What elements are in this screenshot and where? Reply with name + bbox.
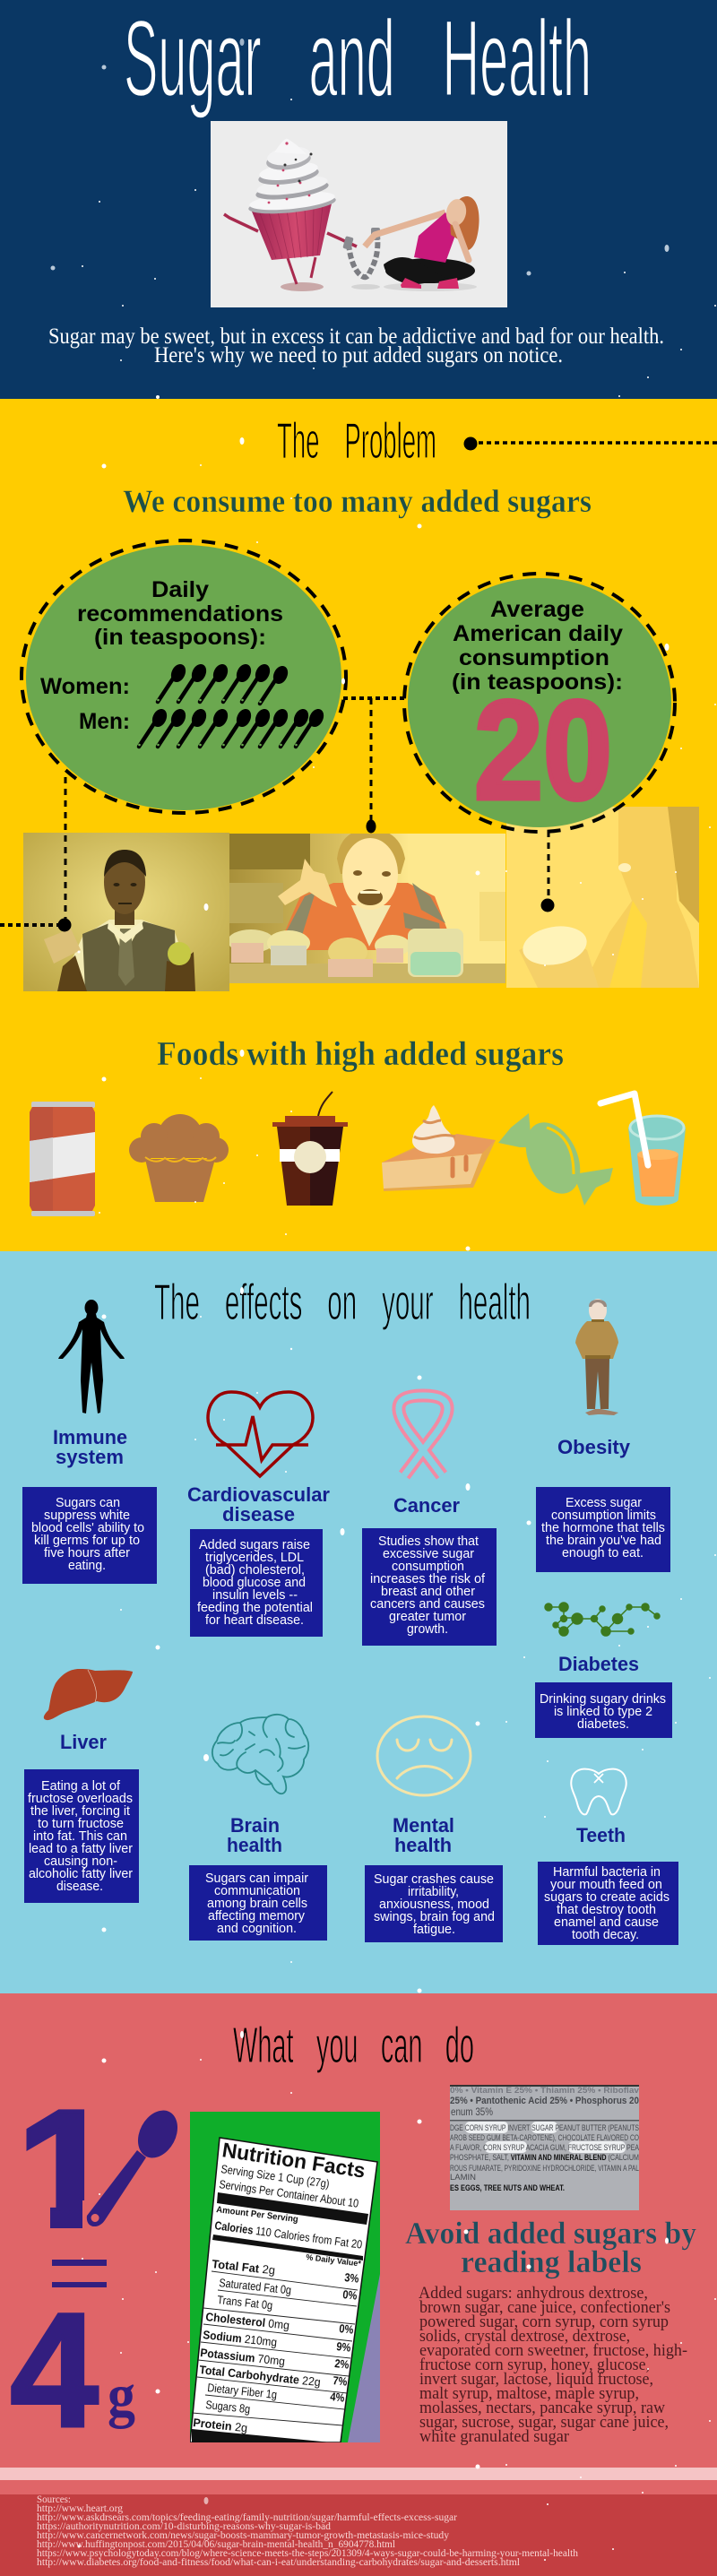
text box: mental health: Sugar crashes cause <box>374 1871 494 1887</box>
text box: brain health: and cognition. <box>217 1921 297 1936</box>
text block: list of added sugars: fructose corn syrup, honey, glucose, <box>419 2356 650 2374</box>
text box: immune system: eating. <box>68 1558 106 1573</box>
number: 1: 1 <box>16 2075 116 2262</box>
text box: diabetes: Drinking sugary drinks <box>540 1691 666 1707</box>
photo: ingredient list: enum 35% <box>451 2105 493 2118</box>
text box: brain health <box>189 1865 327 1941</box>
heading: avoid added sugars by reading labels: reading labels <box>461 2244 642 2279</box>
label: cardiovascular disease <box>187 1483 330 1526</box>
panel: sources: Sources: <box>37 2494 71 2505</box>
label: immune system <box>53 1426 127 1468</box>
text box: mental health: swings, brain fog and <box>374 1909 495 1924</box>
text box: cancer: Studies show that <box>378 1534 479 1549</box>
footer band <box>0 2468 717 2480</box>
photo: nutrition facts label: Dietary Fiber 1g <box>207 2381 278 2401</box>
photo: ingredient list: ROUS FUMARATE, PYRIDOXINE HYDROCHLORIDE, VITAMIN A PAL <box>450 2164 639 2174</box>
photo: girl reaching for cupcakes <box>228 829 505 983</box>
graphic: 1 teaspoon equals 4 grams <box>11 2109 177 2429</box>
text box: cancer: excessive sugar <box>383 1546 474 1561</box>
photo: nutrition facts label: Saturated Fat 0g <box>219 2276 292 2296</box>
text box: diabetes <box>535 1682 672 1738</box>
photo: nutrition facts label: Serving Size 1 Cup (27g) <box>220 2162 330 2191</box>
label: brain health: health <box>227 1834 282 1856</box>
photo: nutrition facts label: 0% <box>339 2321 355 2337</box>
photo: ingredient list: LAMIN <box>450 2173 476 2183</box>
text box: liver: fructose overloads <box>28 1791 133 1806</box>
photo: nutrition facts label: 9% <box>336 2339 352 2355</box>
photo: nutrition facts label: 2% <box>334 2356 350 2372</box>
icon: teaspoon <box>87 2104 186 2226</box>
photo: nutrition facts label: 7% <box>333 2373 349 2389</box>
label: average american daily consumption: consumption <box>459 645 609 670</box>
label: average american daily consumption: Average <box>490 597 584 622</box>
text block: list of added sugars: molasses, nectars, pancake syrup, raw <box>419 2399 666 2417</box>
text box: liver: Eating a lot of <box>41 1778 121 1794</box>
photo: nutrition facts label: Nutrition Facts <box>220 2138 367 2183</box>
text: The Problem <box>277 412 436 470</box>
icon: glucose molecule <box>545 1603 660 1636</box>
text box: liver <box>24 1769 139 1903</box>
text box: immune system: kill germs for up to <box>34 1533 140 1548</box>
chart: daily recommendations circle <box>22 540 346 813</box>
label: cardiovascular disease: disease <box>222 1503 295 1526</box>
connectors: dotted lines to photos <box>0 698 554 932</box>
icon: muffin <box>129 1114 229 1202</box>
panel: sources <box>0 2494 717 2576</box>
text box: immune system: Sugars can <box>56 1495 120 1510</box>
text box: teeth: sugars to create acids <box>544 1889 669 1905</box>
icon: liver <box>44 1669 133 1720</box>
icon: heart with pulse <box>208 1392 313 1476</box>
label: diabetes: Diabetes <box>558 1653 639 1675</box>
text box: brain health: affecting memory <box>208 1908 305 1923</box>
text box: cancer: breast and other <box>381 1584 475 1599</box>
label: obesity: Obesity <box>557 1436 631 1458</box>
photo: ingredient list: A FLAVOR, CORN SYRUP ACACIA GUM, FRUCTOSE SYRUP PEA <box>450 2143 639 2153</box>
intro text: Here's why we need to put added sugars on notice. <box>154 343 563 367</box>
photo: nutrition facts label: Cholesterol 0mg <box>205 2310 290 2332</box>
photo: nutrition facts label: Calories 110 Calories from Fat 20 <box>214 2218 363 2252</box>
text box: cardiovascular disease: feeding the potential <box>197 1600 313 1615</box>
text box: obesity: Excess sugar <box>566 1495 642 1510</box>
icon: brain <box>212 1715 308 1794</box>
icon: awareness ribbon <box>399 1396 447 1475</box>
text box: mental health <box>365 1865 503 1942</box>
icon: sad face <box>377 1716 471 1795</box>
label: mental health: Mental <box>393 1814 454 1837</box>
text box: liver: alcoholic fatty liver <box>29 1866 133 1881</box>
intro text: Sugar may be sweet, but in excess it can be addictive and bad for our health. <box>48 324 664 349</box>
photo: ingredient list: ES EGGS, TREE NUTS AND WHEAT. <box>450 2183 565 2193</box>
text block: list of added sugars: white granulated sugar <box>419 2428 569 2446</box>
label: immune system: Immune <box>53 1426 127 1448</box>
text box: cardiovascular disease: triglycerides, LDL <box>205 1550 304 1565</box>
panel: sources: https://www.psychologytoday.com/blog/where-science-meets-the-steps/201309/4-ways-sugar-could-be-harming-your-mental-health <box>37 2548 578 2559</box>
text box: teeth: tooth decay. <box>572 1927 639 1942</box>
label: immune system: system <box>56 1446 124 1468</box>
text box: obesity: the hormone that tells <box>541 1520 665 1535</box>
text box: obesity: consumption limits <box>551 1508 656 1523</box>
text box: immune system: blood cells' ability to <box>31 1520 144 1535</box>
photo: nutrition facts label: Amount Per Serving <box>216 2205 298 2225</box>
photo: ingredient list: DGE CORN SYRUP INVERT SUGAR PEANUT BUTTER (PEANUTS <box>450 2123 639 2133</box>
text box: cardiovascular disease <box>190 1529 323 1637</box>
text box: mental health: anxiousness, mood <box>379 1897 489 1912</box>
text box: teeth: Harmful bacteria in <box>553 1864 661 1880</box>
label: teeth: Teeth <box>576 1824 626 1846</box>
text box: cancer: greater tumor <box>389 1609 466 1624</box>
label: women with six spoons: Women: <box>40 674 130 699</box>
text box: diabetes: diabetes. <box>577 1716 629 1732</box>
label: average american daily consumption <box>452 597 623 695</box>
icon: body silhouette <box>58 1300 125 1413</box>
text block: list of added sugars: invert sugar, lactose, liquid fructose, <box>419 2371 653 2389</box>
label: brain health: Brain <box>230 1814 280 1837</box>
photo: ingredient list: 25% • Pantothenic Acid 25% • Phosphorus 20 <box>450 2096 639 2106</box>
text box: brain health: Sugars can impair <box>205 1871 308 1886</box>
panel: sources: http://www.askdrsears.com/topics/feeding-eating/family-nutrition/sugar/harmful-effects-excess-sugar <box>37 2512 457 2523</box>
text box: teeth: your mouth feed on <box>550 1877 662 1892</box>
heading: foods with high added sugars: Foods with high added sugars <box>157 1035 564 1073</box>
text box: obesity: the brain you've had <box>546 1533 661 1548</box>
icon: soda can <box>30 1102 95 1216</box>
panel: header background <box>0 0 717 399</box>
photo: nutrition facts label: Servings Per Container About 10 <box>219 2177 359 2210</box>
label: cardiovascular disease: Cardiovascular <box>187 1483 330 1506</box>
text block: list of added sugars: malt syrup, maltose, maple syrup, <box>419 2385 639 2403</box>
label: men with nine spoons: Men: <box>79 709 130 734</box>
heading: what you can do: What you can do <box>233 2017 474 2074</box>
panel: sources: https://authoritynutrition.com/10-disturbing-reasons-why-sugar-is-bad <box>37 2521 331 2532</box>
label: cancer: Cancer <box>393 1494 460 1517</box>
icon: wrapped candy <box>498 1113 613 1206</box>
text block: list of added sugars: solids, crystal dextrose, dextrose, <box>419 2328 630 2346</box>
photo: ingredient list: AROB SEED GUM BETA-CAROTENE), CHOCOLATE FLAVORED CO <box>450 2133 639 2143</box>
number: 4: 4 <box>10 2278 99 2461</box>
chart: average american consumption circle <box>404 574 675 832</box>
text box: liver: the liver, forcing it <box>30 1803 131 1819</box>
text box: cancer <box>362 1528 497 1646</box>
text box: teeth <box>538 1862 678 1945</box>
text box: liver: into fat. This can <box>33 1828 127 1844</box>
text box: cardiovascular disease: insulin levels -- <box>212 1587 298 1603</box>
photo: nutrition facts label: 4% <box>330 2390 346 2405</box>
text box: liver: causing non- <box>44 1854 117 1869</box>
text box: cardiovascular disease: Added sugars raise <box>199 1537 310 1552</box>
text block: list of added sugars: sugar, sucrose, sugar, sugar cane juice, <box>419 2414 669 2432</box>
text box: cardiovascular disease: blood glucose and <box>203 1575 306 1590</box>
heading: we consume too many added sugars: We consume too many added sugars <box>123 483 592 519</box>
text block: list of added sugars: Added sugars: anhydrous dextrose, <box>419 2285 648 2303</box>
photo: man with pastry and apple <box>23 833 229 991</box>
text box: mental health: fatigue. <box>413 1922 455 1937</box>
panel: what you can do background <box>0 1993 717 2576</box>
photo: nutrition facts label: Sugars 8g <box>205 2398 251 2416</box>
text block: list of added sugars: powered sugar, corn syrup, corn syrup <box>419 2313 669 2331</box>
photo: nutrition facts label: Total Carbohydrate 22g <box>199 2363 322 2389</box>
text box: teeth: that destroy tooth <box>557 1902 656 1917</box>
text block: list of added sugars <box>419 2285 687 2446</box>
text box: obesity: enough to eat. <box>562 1545 644 1560</box>
text box: cancer: consumption <box>392 1559 464 1574</box>
connector: dotted line from heading <box>464 437 717 450</box>
text box: immune system <box>22 1487 157 1584</box>
heading: avoid added sugars by reading labels: Avoid added sugars by <box>405 2216 696 2251</box>
photo: woman eating cupcake <box>506 807 699 988</box>
photo: nutrition facts label: Sodium 210mg <box>203 2328 278 2349</box>
text block: list of added sugars: evaporated corn sweetner, fructose, high- <box>419 2342 687 2360</box>
text box: liver: to turn fructose <box>38 1816 124 1831</box>
text box: liver: lead to a fatty liver <box>29 1841 133 1856</box>
text block: list of added sugars: brown sugar, cane juice, confectioner's <box>419 2299 670 2317</box>
text box: cardiovascular disease: for heart disease. <box>205 1612 304 1628</box>
icon: coffee cup <box>272 1092 348 1206</box>
text box: cardiovascular disease: (bad) cholesterol, <box>205 1562 305 1578</box>
label: daily recommendations <box>77 577 283 650</box>
photo: nutrition facts label: Trans Fat 0g <box>217 2293 273 2312</box>
text box: obesity <box>536 1487 670 1572</box>
label: average american daily consumption: American daily <box>453 621 623 646</box>
text box: brain health: communication <box>214 1883 300 1898</box>
photo: ingredient list <box>450 2085 640 2210</box>
label: mental health <box>393 1814 454 1856</box>
photo: ingredient list: 0% • Vitamin E 25% • Thiamin 25% • Riboflav <box>450 2086 640 2096</box>
icon: older man <box>575 1299 618 1415</box>
panel: effects background <box>0 1251 717 1993</box>
text box: immune system: suppress white <box>44 1508 130 1523</box>
icon: pie slice <box>382 1105 496 1191</box>
photo: nutrition facts label <box>190 2112 380 2443</box>
text box: immune system: five hours after <box>44 1545 130 1560</box>
icon: juice glass with straw <box>600 1094 686 1206</box>
text box: diabetes: is linked to type 2 <box>554 1704 652 1719</box>
label: men with nine spoons <box>79 706 326 747</box>
label: daily recommendations: recommendations <box>77 601 283 627</box>
label: mental health: health <box>394 1834 452 1856</box>
photo: nutrition facts label: % Daily Value* <box>306 2252 362 2269</box>
photo: nutrition facts label: Potassium 70mg <box>200 2346 286 2368</box>
panel: sources: http://www.cancernetwork.com/news/sugar-boosts-mammary-tumor-growth-metastasis-mice-study <box>37 2530 449 2541</box>
photo: nutrition facts label: Protein 2g <box>193 2416 248 2434</box>
label: daily recommendations: (in teaspoons): <box>94 625 266 650</box>
label: average american daily consumption: (in teaspoons): <box>452 670 623 695</box>
intro text <box>48 324 664 367</box>
panel: sources: http://www.heart.org <box>37 2503 123 2514</box>
panel: sources: http://www.huffingtonpost.com/2015/04/06/sugar-brain-mental-health_n_6904778.html <box>37 2539 395 2550</box>
number: 20: 20 <box>474 672 612 829</box>
label: liver: Liver <box>60 1731 107 1753</box>
text box: cancer: cancers and causes <box>370 1596 485 1612</box>
icon: tooth <box>571 1769 626 1814</box>
text box: cancer: increases the risk of <box>370 1571 486 1586</box>
panel: the problem background <box>0 399 717 1251</box>
hero image: cupcake chained to woman <box>211 121 507 307</box>
text box: teeth: enamel and cause <box>554 1915 659 1930</box>
photo: nutrition facts label: 3% <box>344 2270 360 2286</box>
label: daily recommendations: Daily <box>151 577 209 602</box>
unit: g: g <box>108 2361 135 2429</box>
photo: nutrition facts label: Total Fat 2g <box>212 2257 276 2277</box>
photo: nutrition facts label: 0% <box>342 2287 358 2303</box>
equals sign <box>52 2260 107 2287</box>
panel: sources: http://www.diabetes.org/food-and-fitness/food/what-can-i-eat/understanding-carbohydrates/sugar-and-desserts.html <box>37 2557 520 2568</box>
text box: brain health: among brain cells <box>207 1896 307 1911</box>
label: women with six spoons <box>40 661 290 704</box>
heading: avoid added sugars by reading labels <box>405 2216 696 2279</box>
text box: liver: disease. <box>56 1879 103 1894</box>
label: brain health <box>227 1814 282 1856</box>
photo: ingredient list: PHOSPHATE, SALT, VITAMIN AND MINERAL BLEND (CALCIUM <box>450 2153 639 2163</box>
text box: mental health: irritability, <box>408 1884 459 1899</box>
text box: cancer: growth. <box>407 1621 448 1637</box>
